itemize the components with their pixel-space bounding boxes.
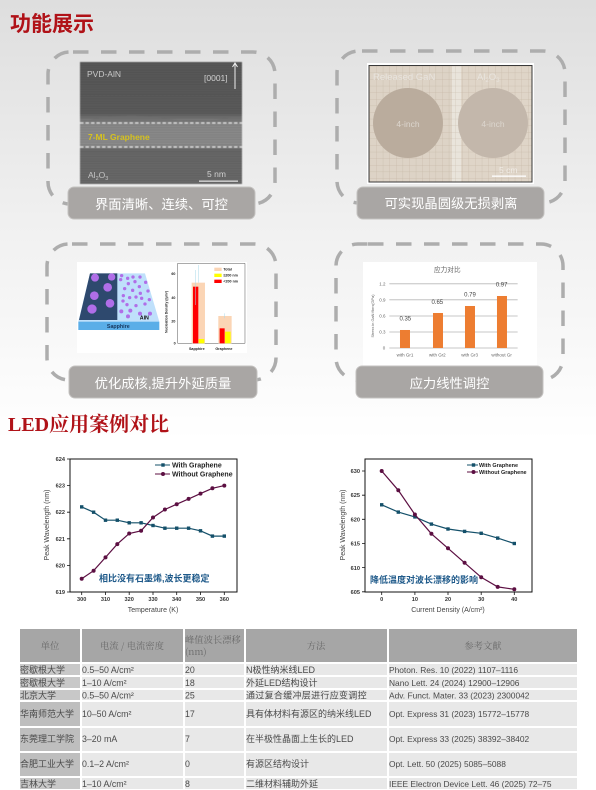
row: 东莞理工学院: 7 [185,734,190,744]
bar chart: nucleation density: 0 [174,342,176,346]
chart: peak wavelength vs temperature: Temperature (K) [128,607,178,614]
schematic and bar chart: Sapphire [107,324,130,330]
chart: peak wavelength vs temperature: 310 [101,597,110,603]
chart: peak wavelength vs current density: Peak Wavelength (nm) [340,490,347,560]
header row: (nm) [185,644,207,658]
chart: peak wavelength vs current density: 0 [380,597,383,603]
bar chart: nucleation density: 40 [171,296,175,300]
header row: 方法 [307,638,326,652]
schematic: sapphire [78,273,159,330]
row: 东莞理工学院: 东莞理工学院 [20,733,74,744]
bar chart: stress comparison: with Gr1 [397,353,414,358]
title: 功能展示: 功能展示 [10,8,94,38]
row: 密歇根大学 20: 0.5–50 A/cm² [82,665,134,675]
bar chart: nucleation density: ≥200 nm [223,274,239,278]
chart: peak wavelength vs current density: 20 [445,597,451,603]
chart: peak wavelength vs temperature: 619 [56,590,65,596]
schematic and bar chart [78,263,245,351]
bar chart: nucleation density [165,263,245,351]
chart: peak wavelength vs temperature: 350 [196,597,205,603]
caption: 优化成核,提升外延质量 [95,376,231,391]
bar chart: stress comparison: 应力对比 [434,265,461,274]
caption: 应力线性调控 [410,376,489,391]
bar chart: stress comparison [371,265,518,358]
row: 吉林大学: IEEE Electron Device Lett. 46 (2025) 72–75 [389,779,552,789]
heading: LED应用案例对比: LED应用案例对比 [8,412,169,436]
chart: peak wavelength vs current density: 40 [511,597,517,603]
legend: With Graphene [172,462,222,470]
TEM image: [0001] [204,73,228,83]
chart: peak wavelength vs current density: 630 [351,469,360,475]
row: 密歇根大学 18 [20,677,577,688]
row: 合肥工业大学: 0 [185,759,190,769]
header row: 单位 [41,638,59,652]
wafer photo [367,63,534,184]
TEM image: 2 [96,176,99,182]
header row: 参考文献 [464,638,502,652]
row: 密歇根大学 18: 外延LED结构设计 [246,677,318,688]
legend [467,463,527,476]
chart: peak wavelength vs current density [340,459,532,614]
chart: peak wavelength vs temperature: 620 [56,564,65,570]
wafer photo: Al [477,72,485,83]
row: 密歇根大学 20 [20,664,577,675]
chart: peak wavelength vs current density: 610 [351,566,360,572]
caption [68,187,255,219]
row: 密歇根大学 18: 18 [185,678,195,688]
header row: 峰值波长漂移 [185,632,241,646]
row: 北京大学: 北京大学 [20,690,56,700]
legend [155,462,233,478]
wafer photo: O [489,72,496,83]
chart: peak wavelength vs temperature: 360 [220,597,229,603]
caption [357,187,544,219]
chart: peak wavelength vs current density: Current Density (A/cm²) [411,607,485,614]
wafer photo: Released GaN [373,72,435,83]
bar chart: nucleation density: <200 nm [223,280,239,284]
bar chart: nucleation density: 60 [171,272,175,276]
row: 吉林大学: 吉林大学 [20,778,56,789]
bar chart: stress comparison: with Gr2 [429,353,446,358]
row: 北京大学: 25 [185,690,195,700]
panel: stress [336,244,563,398]
bar chart: stress comparison: without Gr [491,353,512,358]
panel: nucleation [47,244,276,398]
row: 北京大学: Adv. Funct. Mater. 33 (2023) 2300042 [389,690,530,700]
header row [20,629,577,662]
TEM image: 5 nm [207,169,226,179]
row: 东莞理工学院: 3–20 mA [82,734,117,744]
row: 密歇根大学 20: 20 [185,665,195,675]
row: 北京大学 [20,690,577,700]
row: 合肥工业大学: 合肥工业大学 [20,758,74,769]
row: 合肥工业大学: 0.1–2 A/cm² [82,759,129,769]
TEM image [80,62,242,184]
annotation: 相比没有石墨烯,波长更稳定 [99,572,210,584]
TEM image: O [99,170,106,180]
row: 华南师范大学: 17 [185,709,195,719]
bar chart: stress comparison: Stress in GaN films(GPa) [371,294,375,337]
legend: Without Graphene [172,472,233,478]
wafer photo: 4-inch [396,119,420,129]
caption [69,366,257,398]
bar chart: stress comparison: 0.97 [496,282,508,288]
TEM image: 7-ML Graphene [88,132,150,142]
chart: peak wavelength vs current density: 620 [351,518,360,524]
chart: peak wavelength vs temperature: 621 [56,537,65,543]
row: 华南师范大学: Opt. Express 31 (2023) 15772–15778 [389,709,529,719]
header row: 电流 / 电流密度 [100,638,164,652]
row: 合肥工业大学: 有源区结构设计 [246,758,309,769]
chart: peak wavelength vs current density: 605 [351,590,360,596]
row: 密歇根大学 20: Photon. Res. 10 (2022) 1107–1116 [389,665,518,675]
chart: peak wavelength vs temperature: 623 [56,484,65,490]
bar chart: nucleation density: Graphene [215,347,232,351]
bar chart: stress comparison: 0.9 [379,297,386,302]
chart: peak wavelength vs current density: 625 [351,493,360,499]
table: LED cases [20,629,577,789]
row: 密歇根大学 20: N极性纳米线LED [246,664,316,675]
row: 吉林大学: 1–10 A/cm² [82,779,127,789]
row: 东莞理工学院: Opt. Express 33 (2025) 38392–38402 [389,734,529,744]
chart: peak wavelength vs temperature: Peak Wavelength (nm) [44,490,51,560]
row: 吉林大学: 8 [185,779,190,789]
panel: interface [48,52,275,219]
bar chart: stress comparison: 0.79 [464,292,476,298]
row: 北京大学: 0.5–50 A/cm² [82,690,134,700]
bar chart: stress comparison: 0.65 [431,300,444,306]
legend: Without Graphene [479,470,527,476]
wafer photo: 4-inch [481,119,505,129]
row: 华南师范大学 [20,702,577,726]
bar chart: stress comparison: 0.6 [379,314,386,319]
wafer photo: 3 [496,78,500,84]
annotation: 降低温度对波长漂移的影响 [370,574,478,585]
bar chart: stress comparison: 0 [383,346,386,351]
row: 合肥工业大学: Opt. Lett. 50 (2025) 5085–5088 [389,759,506,769]
row: 密歇根大学 18: 密歇根大学 [20,677,65,688]
chart: peak wavelength vs temperature: 320 [125,597,134,603]
bar chart: stress comparison: 0.35 [399,316,412,322]
chart: peak wavelength vs temperature [44,457,237,614]
chart: peak wavelength vs current density: 30 [478,597,484,603]
row: 华南师范大学: 10–50 A/cm² [82,709,131,719]
caption: 可实现晶圆级无损剥离 [385,195,517,211]
TEM image: 3 [105,176,108,182]
row: 吉林大学: 二维材料辅助外延 [246,778,318,789]
chart: peak wavelength vs temperature: 340 [172,597,181,603]
row: 合肥工业大学 [20,753,577,776]
bar chart: nucleation density: Total [223,268,232,272]
caption: 界面清晰、连续、可控 [95,197,228,212]
schematic and bar chart: AlN [140,316,149,322]
row: 北京大学: 通过复合缓冲层进行应变调控 [246,690,367,700]
wafer photo: 5 cm [499,165,517,175]
row: 吉林大学 [20,778,577,789]
row: 东莞理工学院 [20,728,577,751]
wafer photo: 2 [485,78,489,84]
chart: peak wavelength vs temperature: 330 [148,597,158,603]
bar chart: nucleation density: Sapphire [189,347,205,351]
row: 密歇根大学 18: Nano Lett. 24 (2024) 12900–12906 [389,678,520,688]
chart: peak wavelength vs temperature: 300 [77,597,86,603]
bar chart: stress comparison: with Gr3 [461,353,479,358]
chart: peak wavelength vs current density: 10 [412,597,418,603]
TEM image: PVD-AlN [87,69,121,79]
bar chart: stress comparison: 0.3 [379,330,386,335]
bar chart: stress comparison: 1.2 [379,281,386,286]
chart: peak wavelength vs current density: 615 [351,542,360,548]
caption [356,366,543,398]
row: 华南师范大学: 华南师范大学 [20,708,74,719]
chart: peak wavelength vs temperature: 622 [56,510,65,516]
legend: With Graphene [479,463,518,469]
TEM image: Al [88,170,96,180]
row: 华南师范大学: 具有体材料有源区的纳米线LED [246,708,372,719]
chart: peak wavelength vs temperature: 624 [56,457,66,463]
bar chart: nucleation density: 20 [171,319,175,323]
panel: wafer release [337,51,565,219]
row: 东莞理工学院: 在半极性晶面上生长的LED [246,733,354,744]
bar chart: nucleation density: Nucleation Density (/μm²) [165,291,169,333]
row: 密歇根大学 18: 1–10 A/cm² [82,678,127,688]
row: 密歇根大学 20: 密歇根大学 [20,664,65,675]
